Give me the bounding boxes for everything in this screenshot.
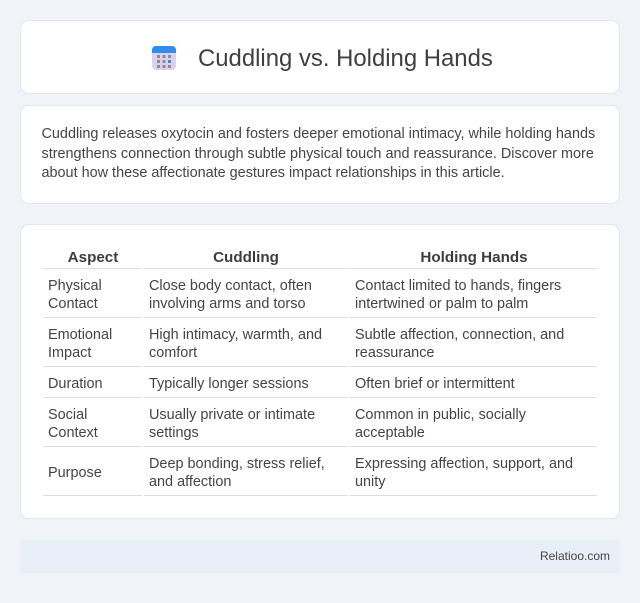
row: social context: Context [48,425,98,441]
row: emotional impact [43,327,597,367]
row: purpose: Purpose [48,465,102,481]
row: duration: Often brief or intermittent [355,376,515,392]
row: emotional impact: reassurance [355,345,434,361]
footer bar [20,540,620,573]
row: purpose [43,456,597,496]
row: purpose: Expressing affection, support, and [355,456,573,472]
table header: Aspect [68,249,118,266]
row: duration [43,376,597,398]
table header: Cuddling [213,249,279,266]
row: physical contact [43,278,597,318]
row: social context: settings [149,425,199,441]
row: physical contact: Contact limited to hands, fingers [355,278,561,294]
row: purpose: Deep bonding, stress relief, [149,456,325,472]
title: Cuddling vs. Holding Hands [198,45,493,72]
row: physical contact: involving arms and torso [149,296,305,312]
row: physical contact: Physical [48,278,102,294]
row: social context: Common in public, socially [355,407,526,423]
row: purpose: unity [355,474,386,490]
row: social context: Social [48,407,87,423]
row: emotional impact: High intimacy, warmth, and [149,327,322,343]
text block: intro [42,126,595,181]
footer text: Relatioo.com [540,549,610,563]
panel: comparison table [20,224,620,519]
icon: calendar [152,46,176,70]
text block: intro: Cuddling releases oxytocin and fosters deeper emotional intimacy, while holding hands [42,126,595,142]
panel: introduction [20,105,620,204]
row: social context: Usually private or intimate [149,407,315,423]
row: emotional impact: Subtle affection, connection, and [355,327,564,343]
text block: intro: strengthens connection through subtle physical touch and reassurance. Discover more [42,146,594,162]
row: emotional impact: Emotional [48,327,112,343]
row: social context [43,407,597,447]
table header [43,249,597,269]
row: duration: Duration [48,376,103,392]
panel: title card [20,20,620,94]
row: physical contact: intertwined or palm to palm [355,296,528,312]
row: emotional impact: comfort [149,345,197,361]
table header: Holding Hands [420,249,528,266]
row: physical contact: Close body contact, often [149,278,312,294]
text block: intro: about how these affectionate gestures impact relationships in this article. [42,165,505,181]
row: social context: acceptable [355,425,425,441]
row: physical contact: Contact [48,296,98,312]
row: duration: Typically longer sessions [149,376,309,392]
row: emotional impact: Impact [48,345,91,361]
row: purpose: and affection [149,474,231,490]
